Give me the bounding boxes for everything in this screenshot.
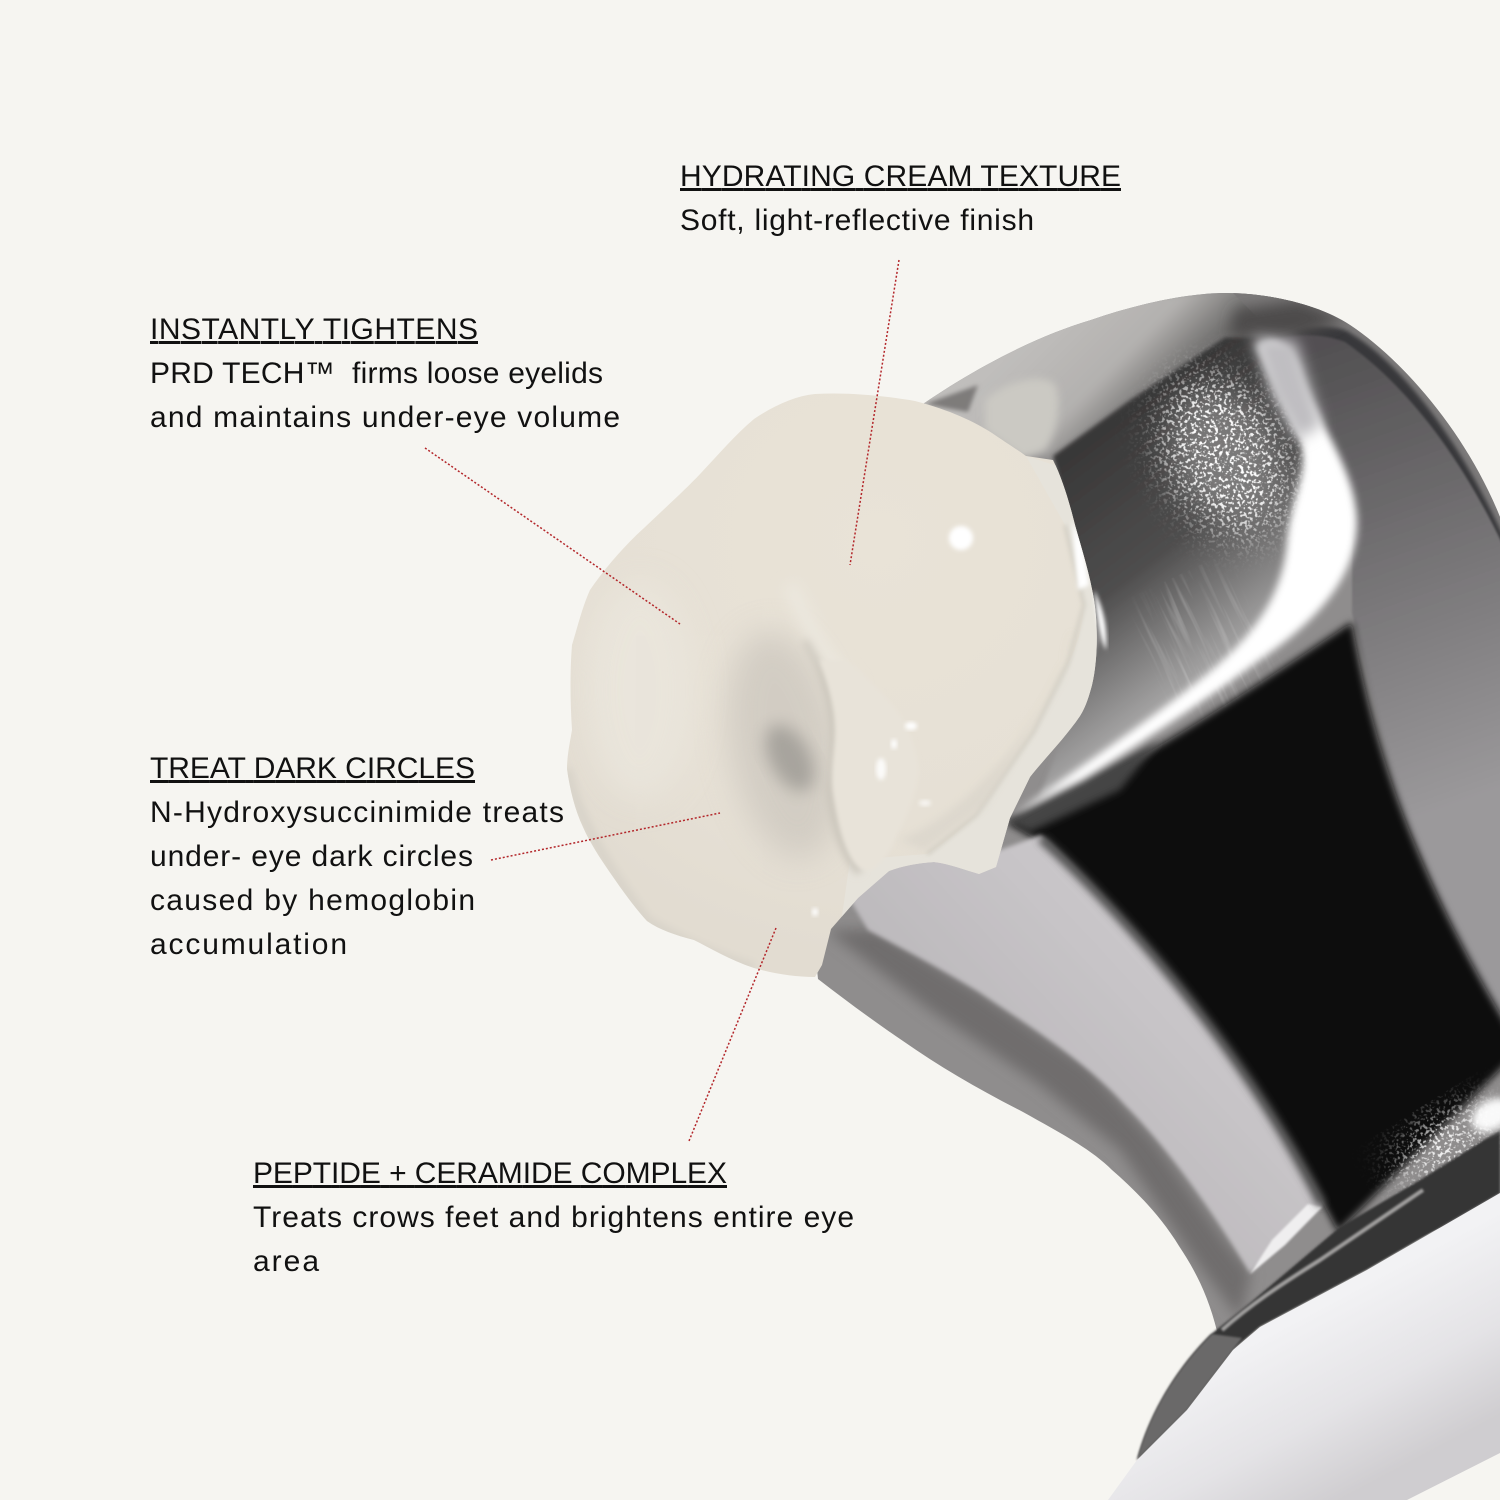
black central reflection [1007, 622, 1500, 1232]
body: under- eye dark circles [150, 840, 473, 873]
lower band dark inner shade [826, 929, 1251, 1320]
sparkle glow [1156, 375, 1291, 530]
upper dark fade [1230, 300, 1345, 345]
body: and maintains under-eye volume [150, 401, 620, 434]
light patch beside cream [985, 379, 1058, 458]
collar sparkle [1465, 1091, 1500, 1139]
shadow on lower right of cream [914, 768, 1002, 844]
callout: treat dark circles [150, 752, 564, 961]
shaded dimple [723, 630, 831, 859]
heading: TREAT DARK CIRCLES [150, 752, 475, 785]
dark gray start of reflection [1007, 740, 1160, 832]
heading: HYDRATING CREAM TEXTURE [680, 160, 1121, 193]
white glint at lavender foot [1250, 1204, 1322, 1274]
brushed metal streaks [1140, 567, 1260, 704]
gray top of highlight [1252, 336, 1322, 440]
body: Treats crows feet and brightens entire eye [253, 1201, 854, 1234]
leader line: instantly tightens [425, 448, 680, 624]
soft crease above petal [808, 634, 830, 660]
body: caused by hemoglobin [150, 884, 475, 917]
metal applicator head [780, 280, 1500, 1340]
outer top curve [1233, 293, 1500, 529]
body: Soft, light-reflective finish [680, 204, 1034, 237]
callout: instantly tightens [150, 313, 620, 434]
gray tail of collar [1137, 1334, 1242, 1460]
callout: peptide + ceramide complex [253, 1157, 854, 1278]
collar glint line [1222, 1190, 1423, 1330]
dark dimple centre [759, 720, 821, 796]
leader line: hydrating cream texture [850, 260, 899, 565]
shadow at petal edge [806, 640, 860, 872]
heading: INSTANTLY TIGHTENS [150, 313, 478, 346]
upper rim of the metal [924, 293, 1313, 458]
soft edge between lavender and black [1041, 838, 1322, 1205]
body [253, 1201, 854, 1278]
body: PRD TECH™ firms loose eyelids [150, 357, 603, 390]
glossy spot highlights [812, 526, 973, 916]
body: N-Hydroxysuccinimide treats [150, 796, 564, 829]
bright metal glint next to rim [1094, 590, 1106, 650]
cream dollop [560, 385, 1115, 985]
leader line: treat dark circles [491, 813, 720, 860]
sparkle texture [1135, 353, 1315, 557]
callout: hydrating cream texture [680, 160, 1121, 237]
bright rim highlight [1072, 520, 1089, 590]
dark band along the top curve [1288, 325, 1500, 541]
lavender reflection [850, 835, 1322, 1273]
body: area [253, 1245, 319, 1278]
white applicator base [1108, 1193, 1500, 1500]
right gray surface [1288, 335, 1500, 1010]
white curved highlight [1010, 340, 1357, 818]
speckled edge at top of metal [925, 385, 978, 412]
leader line: peptide + ceramide complex [689, 928, 776, 1141]
soft glow on left lobe [585, 580, 695, 800]
product photo: metal applicator with cream [560, 280, 1500, 1500]
shade line inside rim [927, 525, 1084, 854]
lighter outer cream rim [842, 466, 1097, 916]
dark neck collar [1137, 1130, 1500, 1460]
sparkle over black near collar [1384, 1092, 1500, 1198]
cream fold petal [822, 665, 863, 868]
body: accumulation [150, 928, 347, 961]
brushed dark panel [1042, 334, 1306, 792]
soft shade on lower left edge [567, 769, 754, 968]
body [150, 357, 620, 434]
heading: PEPTIDE + CERAMIDE COMPLEX [253, 1157, 727, 1190]
body [150, 796, 564, 961]
